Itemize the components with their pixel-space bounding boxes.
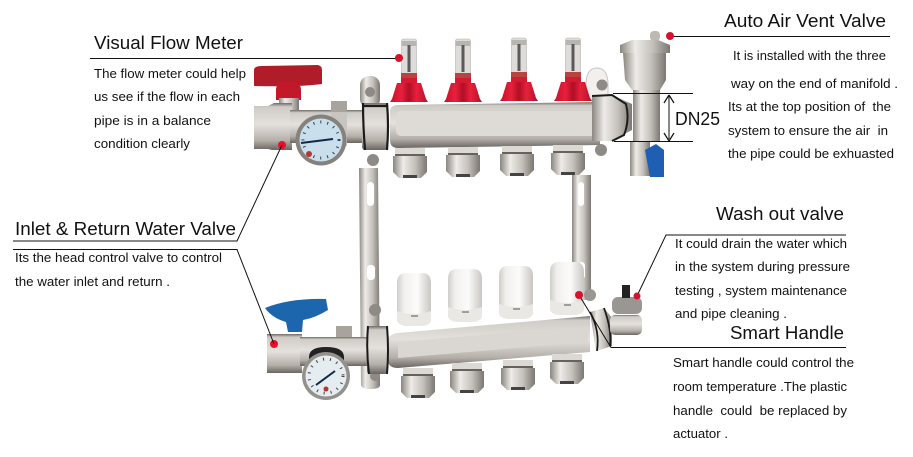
label: visual flow meter: The flow meter could help — [94, 67, 246, 81]
label: smart handle: room temperature .The plastic — [673, 380, 847, 394]
label: visual flow meter: pipe is in a balance — [94, 114, 211, 128]
label: wash out valve: testing , system maintenance — [675, 284, 847, 298]
clamp: top left — [362, 103, 388, 150]
wash out valve — [610, 285, 642, 335]
label: auto air vent valve: way on the end of manifold . — [730, 77, 898, 91]
label: visual flow meter: us see if the flow in each — [94, 90, 240, 104]
label: auto air vent valve: system to ensure the air in — [728, 124, 888, 138]
label: auto air vent valve: the pipe could be exhuasted — [728, 147, 894, 161]
label: auto air vent valve — [666, 10, 898, 161]
label: auto air vent valve: Its at the top position of the — [728, 100, 891, 114]
label: inlet and return water valve — [13, 145, 282, 344]
label: smart handle: actuator . — [673, 427, 728, 441]
label: auto air vent valve: It is installed with the three — [733, 49, 886, 63]
red marker: inlet top — [278, 141, 286, 149]
label: visual flow meter: condition clearly — [94, 137, 191, 151]
label: wash out valve: It could drain the water which — [675, 237, 847, 251]
bracket strap: left — [359, 76, 381, 389]
bottom manifold — [367, 308, 612, 374]
label: visual flow meter: Visual Flow Meter — [94, 32, 243, 53]
bottom compression fittings — [401, 354, 584, 398]
blue valve handle — [265, 299, 328, 332]
label: auto air vent valve: Auto Air Vent Valve — [724, 10, 886, 31]
bottom inlet valve — [265, 299, 370, 400]
label: visual flow meter — [90, 32, 403, 151]
dimension: DN25 — [613, 94, 720, 142]
top manifold — [362, 95, 632, 150]
dimension: DN25: DN25 — [675, 109, 720, 129]
red marker: inlet bottom — [270, 340, 278, 348]
blue drain tab — [645, 144, 664, 177]
clamp: bottom right — [590, 308, 612, 351]
clamp: bottom left — [367, 326, 388, 374]
bracket strap: right — [572, 68, 608, 301]
label: inlet and return water valve: Inlet & Return Water Valve — [15, 218, 236, 239]
label: smart handle: Smart Handle — [730, 322, 844, 343]
red valve handle — [254, 65, 322, 111]
label: smart handle: Smart handle could control the — [673, 356, 854, 370]
label: wash out valve: Wash out valve — [716, 203, 844, 224]
label: inlet and return water valve: Its the head control valve to control — [15, 251, 222, 265]
white smart handles — [397, 262, 584, 326]
top inlet valve — [254, 65, 362, 166]
label: wash out valve: and pipe cleaning . — [675, 307, 787, 321]
pressure gauge: bottom — [302, 352, 350, 400]
label: smart handle — [575, 291, 854, 441]
top compression fittings — [393, 145, 585, 178]
flow meters — [390, 38, 592, 102]
auto air vent valve — [620, 31, 670, 177]
pressure gauge: top — [296, 114, 346, 166]
label: inlet and return water valve: the water inlet and return . — [15, 275, 170, 289]
label: wash out valve: in the system during pressure — [675, 260, 850, 274]
clamp: top right — [592, 95, 632, 141]
label: wash out valve — [634, 203, 850, 321]
label: smart handle: handle could be replaced by — [673, 404, 848, 418]
